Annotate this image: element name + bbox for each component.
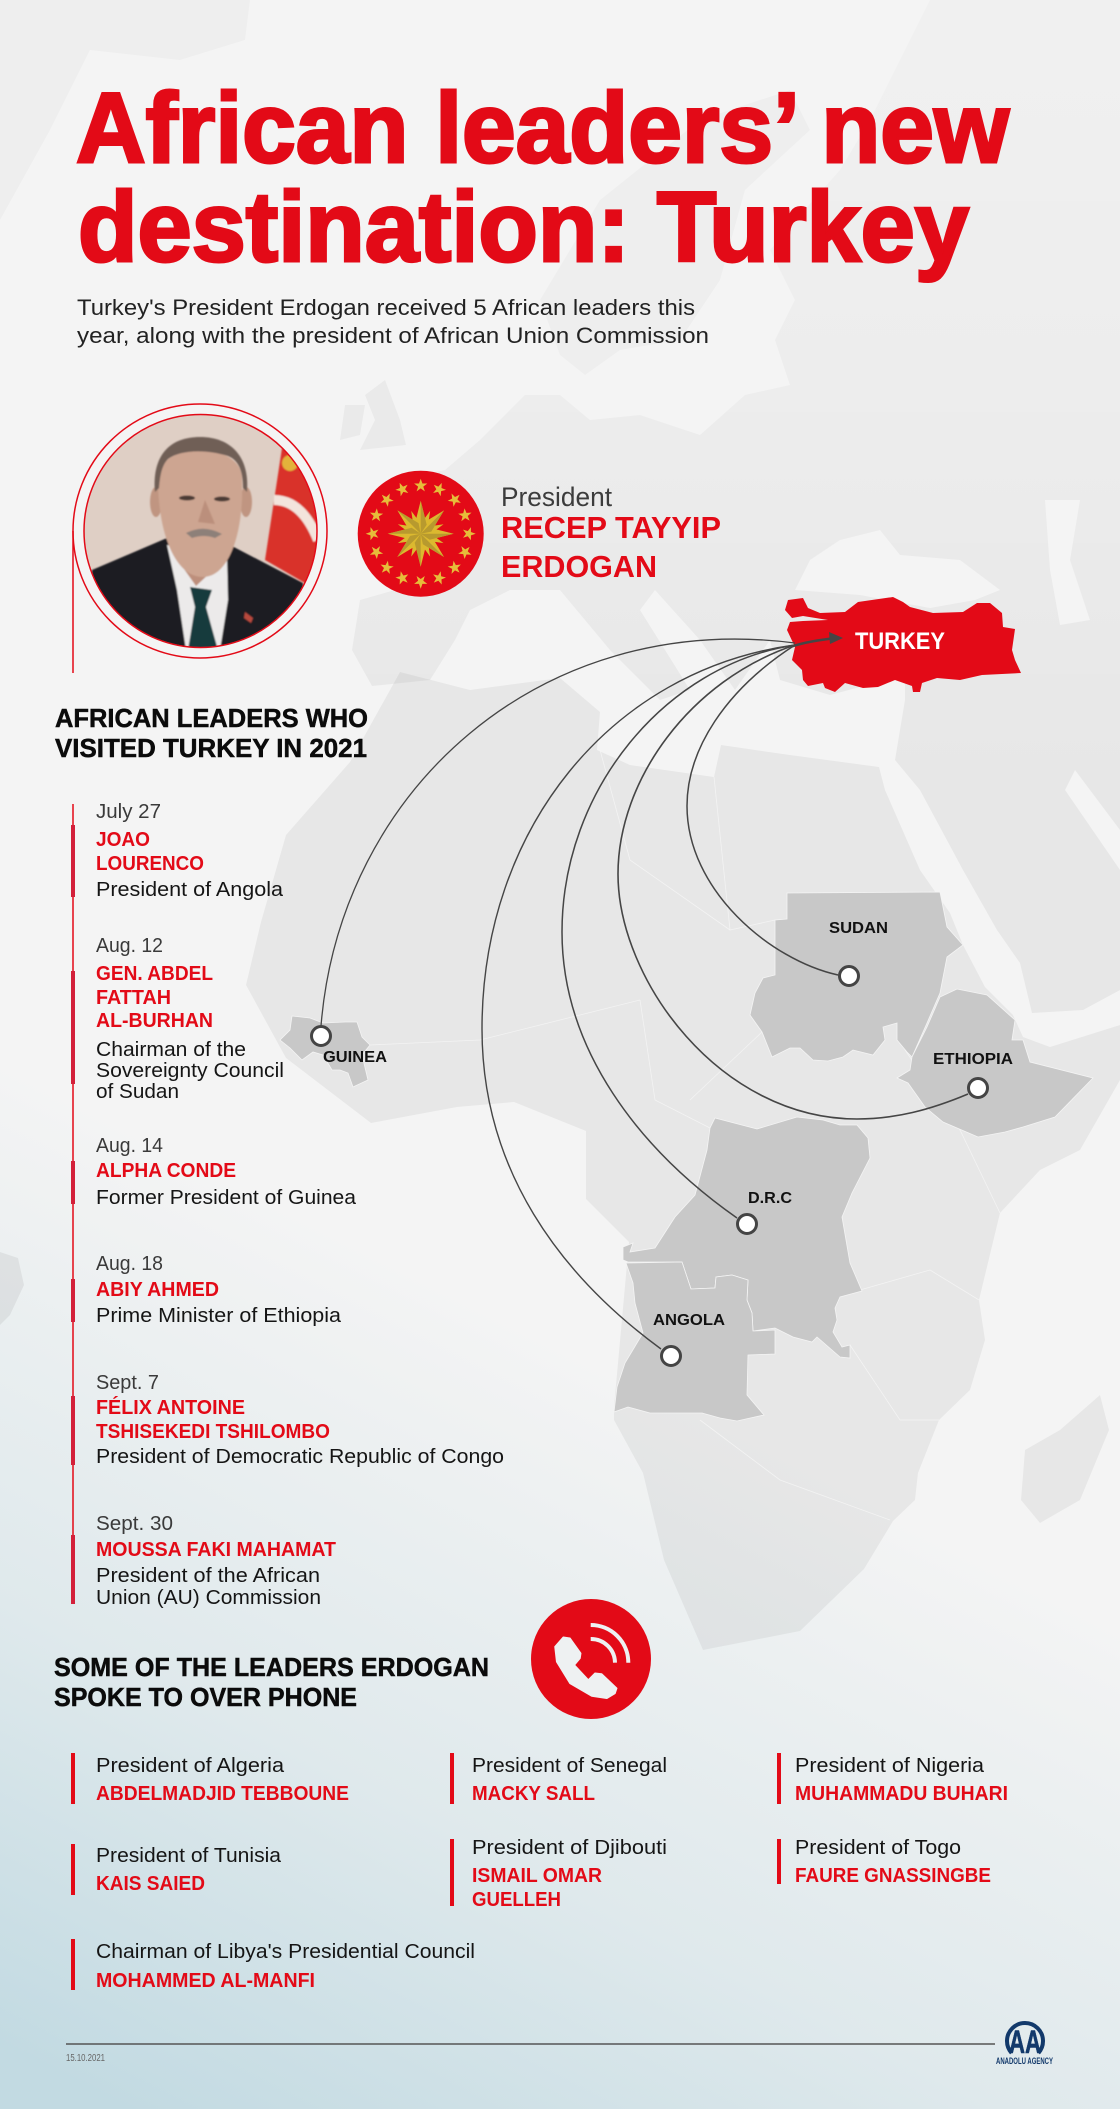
- heading: leaders who visited: AFRICAN LEADERS WHO: [55, 703, 368, 733]
- title: [76, 72, 1010, 282]
- call: Djibouti: [450, 1837, 667, 1911]
- marker: Angola: ANGOLA: [653, 1312, 725, 1329]
- visit: Alpha Conde: ALPHA CONDE: [96, 1160, 236, 1182]
- arc: Angola to Turkey: [482, 645, 795, 1349]
- call: Nigeria: President of Nigeria: [795, 1755, 985, 1777]
- logo: Anadolu Agency: [996, 2023, 1053, 2066]
- visit: Abdel Fattah al-Burhan: Chairman of the: [96, 1039, 246, 1061]
- call: Tunisia: [71, 1844, 282, 1895]
- icon: phone: [531, 1599, 651, 1719]
- visit: Felix Tshisekedi: [71, 1372, 504, 1468]
- label: Turkey: TURKEY: [855, 628, 945, 655]
- call: Togo: FAURE GNASSINGBE: [795, 1865, 991, 1887]
- visit: Joao Lourenco: [71, 801, 284, 901]
- visit: Abiy Ahmed: ABIY AHMED: [96, 1279, 219, 1301]
- visit: Joao Lourenco: JOAO: [96, 829, 150, 851]
- call: Algeria: President of Algeria: [96, 1755, 285, 1777]
- visit: Abdel Fattah al-Burhan: of Sudan: [96, 1081, 179, 1103]
- call: Libya: Chairman of Libya's Presidential Council: [96, 1941, 475, 1963]
- title: destination: Turkey: [78, 171, 969, 282]
- title: African leaders’ new: [76, 72, 1010, 183]
- arrow: into Turkey: [790, 632, 843, 647]
- visit: Abdel Fattah al-Burhan: FATTAH: [96, 987, 171, 1009]
- map: Persian Gulf: [1065, 770, 1120, 870]
- visit: Joao Lourenco: LOURENCO: [96, 853, 204, 875]
- marker: Guinea: [312, 1026, 387, 1066]
- visit: Moussa Faki Mahamat: Union (AU) Commission: [96, 1587, 321, 1609]
- visit: Joao Lourenco: President of Angola: [96, 879, 284, 901]
- call: Libya: MOHAMMED AL-MANFI: [96, 1970, 315, 1992]
- portrait: President Erdogan: [73, 404, 330, 673]
- arc: Guinea to Turkey: [321, 639, 795, 1026]
- map: Scandinavia: [540, 90, 810, 375]
- call: Senegal: President of Senegal: [472, 1755, 667, 1777]
- marker: Ethiopia: [933, 1051, 1013, 1098]
- country: Guinea: [280, 1016, 370, 1087]
- call: Nigeria: [777, 1753, 1008, 1805]
- arc: Sudan to Turkey: [687, 645, 838, 975]
- president name block: President: [501, 482, 612, 512]
- map: Caspian Sea: [1045, 500, 1090, 625]
- call: Senegal: MACKY SALL: [472, 1783, 595, 1805]
- marker: D.R.C: [738, 1190, 792, 1234]
- heading: phone calls: [54, 1652, 489, 1712]
- visit: Moussa Faki Mahamat: President of the African: [96, 1565, 320, 1587]
- country: Ethiopia: [897, 989, 1093, 1137]
- president name block: ERDOGAN: [501, 549, 657, 584]
- visit: Abiy Ahmed: Prime Minister of Ethiopia: [96, 1305, 342, 1327]
- visit: Alpha Conde: [71, 1135, 357, 1209]
- call list: [71, 1753, 1008, 1992]
- president name block: [501, 482, 721, 584]
- visit: Abdel Fattah al-Burhan: Aug. 12: [96, 935, 163, 957]
- subtitle: year, along with the president of African Union Commission: [77, 323, 709, 348]
- call: Tunisia: President of Tunisia: [96, 1845, 282, 1867]
- call: Algeria: [71, 1753, 349, 1805]
- country: D.R. Congo: [623, 1117, 870, 1358]
- visit: Moussa Faki Mahamat: [71, 1513, 336, 1609]
- heading: leaders who visited: VISITED TURKEY IN 2021: [55, 733, 367, 763]
- visit: Felix Tshisekedi: FÉLIX ANTOINE: [96, 1396, 245, 1419]
- visit: Moussa Faki Mahamat: MOUSSA FAKI MAHAMAT: [96, 1539, 336, 1561]
- subtitle: [77, 295, 709, 348]
- call: Libya: [71, 1939, 475, 1992]
- visit: Moussa Faki Mahamat: Sept. 30: [96, 1513, 173, 1535]
- map: South America edge: [0, 1252, 24, 1325]
- map: Madagascar: [1021, 1395, 1109, 1523]
- call: Senegal: [450, 1753, 667, 1805]
- map: Eurasia: [352, 0, 1120, 1013]
- map: Greenland: [0, 0, 250, 220]
- visit: Felix Tshisekedi: Sept. 7: [96, 1372, 159, 1394]
- marker: Sudan: [829, 920, 888, 986]
- country: Angola: [614, 1262, 775, 1421]
- heading: phone calls: SPOKE TO OVER PHONE: [54, 1682, 357, 1712]
- marker: Ethiopia: ETHIOPIA: [933, 1051, 1013, 1068]
- call: Tunisia: KAIS SAIED: [96, 1873, 205, 1895]
- logo: Anadolu Agency: AA: [1009, 2024, 1041, 2060]
- call: Djibouti: ISMAIL OMAR: [472, 1865, 603, 1887]
- heading: leaders who visited: [55, 703, 368, 763]
- map: Africa: [246, 672, 1120, 1650]
- visit: Alpha Conde: Aug. 14: [96, 1135, 163, 1157]
- visit: Abiy Ahmed: [71, 1253, 342, 1327]
- visit: Joao Lourenco: July 27: [96, 801, 161, 823]
- call: Togo: [777, 1837, 991, 1887]
- country: Turkey: [785, 597, 1021, 692]
- country: Sudan: [750, 892, 963, 1061]
- marker: Sudan: SUDAN: [829, 920, 888, 937]
- marker: Guinea: GUINEA: [323, 1049, 387, 1066]
- heading: phone calls: SOME OF THE LEADERS ERDOGAN: [54, 1652, 489, 1682]
- marker: Angola: [653, 1312, 725, 1366]
- world map background: [0, 0, 1120, 1650]
- emblem: presidential seal: [358, 471, 484, 597]
- subtitle: Turkey's President Erdogan received 5 African leaders this: [77, 295, 695, 320]
- map: Ireland: [340, 405, 365, 440]
- call: Djibouti: GUELLEH: [472, 1889, 561, 1911]
- visit: Felix Tshisekedi: TSHISEKEDI TSHILOMBO: [96, 1421, 330, 1443]
- call: Nigeria: MUHAMMADU BUHARI: [795, 1783, 1008, 1805]
- call: Djibouti: President of Djibouti: [472, 1837, 667, 1859]
- map: Britain: [360, 380, 406, 450]
- map: Black Sea: [795, 530, 1000, 608]
- visit: Abdel Fattah al-Burhan: Sovereignty Council: [96, 1060, 284, 1082]
- visit: Abdel Fattah al-Burhan: AL-BURHAN: [96, 1010, 213, 1032]
- visit: Felix Tshisekedi: President of Democratic Republic of Congo: [96, 1446, 504, 1468]
- timeline: [71, 801, 504, 1609]
- call: Algeria: ABDELMADJID TEBBOUNE: [96, 1783, 349, 1805]
- president name block: RECEP TAYYIP: [501, 510, 721, 545]
- arc: Ethiopia to Turkey: [618, 645, 968, 1119]
- call: Togo: President of Togo: [795, 1837, 961, 1859]
- arcs: visits to Turkey: [321, 632, 968, 1349]
- visit: Alpha Conde: Former President of Guinea: [96, 1187, 357, 1209]
- marker: D.R.C: D.R.C: [748, 1190, 792, 1207]
- footer rule and date: 15.10.2021: [66, 2053, 105, 2064]
- arc: D.R. Congo to Turkey: [562, 645, 795, 1218]
- visit: Abiy Ahmed: Aug. 18: [96, 1253, 163, 1275]
- visit: Abdel Fattah al-Burhan: GEN. ABDEL: [96, 963, 213, 985]
- visit: Abdel Fattah al-Burhan: [71, 935, 284, 1103]
- logo: Anadolu Agency: ANADOLU AGENCY: [996, 2056, 1053, 2066]
